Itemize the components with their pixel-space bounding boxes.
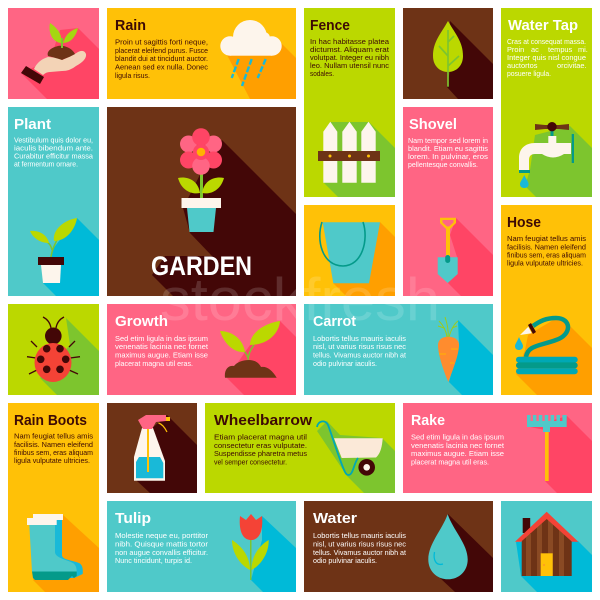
panel: plant (8, 107, 99, 296)
text block: tellus. Vivamus auctor nibh at (313, 548, 406, 557)
panel: fence (304, 8, 395, 197)
text block: venenatis lacinia nec fornet (411, 441, 504, 450)
heading: Carrot (313, 313, 356, 330)
icon: water drop (428, 514, 468, 579)
long shadow (516, 316, 592, 395)
text block: sodales. (310, 69, 334, 78)
text block: odio pulvinar iaculis. (313, 359, 377, 368)
text block: nisl, ut varius risus risus nec (313, 342, 406, 351)
text block (313, 334, 406, 368)
heading: Rain Boots (14, 412, 87, 429)
text block: auctortos (507, 61, 538, 70)
text block (411, 432, 504, 466)
text block: Lobortis tellus mauris iaculis (313, 334, 406, 343)
text block: venenatis lacinia nec fornet (115, 342, 208, 351)
text block: facilisis. Namen eleifend (507, 242, 586, 252)
panel: rain (107, 8, 296, 99)
icon: seedling in soil (220, 321, 280, 378)
text block (507, 37, 588, 78)
long shadow (227, 321, 296, 395)
long shadow (43, 218, 99, 296)
text block (214, 432, 307, 466)
text block: In hac habitasse platea (310, 37, 390, 46)
text block (313, 531, 406, 565)
text block (310, 37, 390, 78)
text block (408, 136, 488, 169)
text block: pellentesque convallis. (408, 160, 478, 169)
text block: leo. Nullam utensil nunc (310, 61, 389, 70)
text block: mi. (578, 45, 588, 54)
text block: Sed etim ligula in das ipsum (115, 334, 208, 343)
text block: Aenean sed ex nulla. Donec (115, 62, 208, 72)
text block (115, 334, 208, 368)
panel: spray bottle (107, 403, 197, 493)
text block (115, 531, 209, 565)
icon: hand holding sprout (21, 23, 86, 84)
text block: maximus augue. Etiam isse (411, 449, 504, 458)
text block: Nam feugiat tellus amis (14, 432, 93, 440)
icon: fence (318, 122, 380, 183)
text block: tellus. Vivamus auctor nibh at (313, 350, 406, 360)
long shadow (333, 222, 395, 296)
long shadow (447, 21, 493, 99)
icon: spray bottle (134, 415, 170, 481)
text block: at fermentum ornare. (14, 160, 78, 168)
icon: potted flower (178, 128, 224, 232)
panel: leaf (403, 8, 493, 99)
heading: Water (313, 510, 357, 527)
text block (115, 38, 208, 80)
icon: water tap (519, 122, 574, 188)
text block: facilisis. Namen eleifend (14, 440, 93, 449)
heading: Rain (115, 17, 146, 34)
text block: Integer quis nisl congue (507, 53, 586, 62)
long shadow (152, 140, 296, 296)
icon: shovel (438, 218, 458, 283)
heading: Plant (14, 116, 51, 133)
text block (14, 136, 94, 168)
icon: ladybug (27, 317, 80, 382)
long shadow (227, 42, 296, 99)
icon: carrot (438, 317, 459, 382)
text block: lorem. In pulvinar, eros (408, 152, 488, 161)
long shadow (530, 416, 592, 493)
panel: carrot (304, 304, 493, 395)
watermark: stockfresh (160, 266, 440, 333)
text block: Lobortis tellus mauris iaculis (313, 531, 406, 540)
text block: iaculis bibendum ante. (14, 144, 93, 152)
panel: ladybug (8, 304, 99, 395)
panel: shovel (403, 107, 493, 296)
icon: rake (527, 415, 567, 481)
text block: volutpat. Integer eu nibh (310, 53, 389, 62)
text block: Proin (507, 45, 524, 54)
icon: rain boots (27, 514, 83, 580)
panel: water tap (501, 8, 592, 197)
text block: Etiam placerat magna util (214, 432, 307, 442)
heading: Wheelbarrow (214, 412, 312, 429)
long shadow (33, 515, 99, 592)
text block: dictumst. Aliquam erat (310, 45, 389, 54)
icon: garden hose (515, 318, 578, 374)
text block: ligula risus. (115, 71, 150, 80)
text block: odio pulvinar iaculis. (313, 556, 377, 565)
text block: Nam feugiat tellus amis (507, 234, 586, 243)
panel: house (501, 501, 592, 592)
text block: posuere ligula. (507, 69, 551, 78)
text block: blandit dui at tincidunt auctor. (115, 54, 208, 63)
long shadow (449, 320, 493, 395)
heading: Water Tap (508, 17, 578, 34)
long shadow (40, 318, 99, 395)
text block: Proin ut sagittis forti neque, (115, 38, 208, 46)
icon: leaf (433, 21, 463, 87)
text block: finibus sem, eras aliquam (507, 250, 586, 260)
text block: tempus (548, 45, 573, 54)
long shadow (516, 541, 592, 592)
heading: Fence (310, 17, 350, 34)
icon: wheelbarrow (317, 421, 383, 476)
long shadow (21, 28, 99, 99)
text block: Nunc tincidunt, turpis id. (115, 556, 192, 565)
text block: placerat magna util eras. (115, 359, 193, 368)
text block: ligula vulputate ultricies. (14, 456, 90, 465)
text block: consectetur eras vulputate. (214, 441, 307, 450)
panel: rain boots (8, 403, 99, 592)
long shadow (323, 122, 395, 197)
text block: Molestie neque eu, porttitor (115, 531, 209, 540)
panel: wheelbarrow (205, 403, 395, 493)
text block (14, 432, 93, 465)
text block: vel semper consectetur. (214, 458, 287, 466)
text block: ac (531, 45, 539, 54)
text block: blandit. Etiam eu sagittis (408, 144, 488, 153)
text block: non augue convallis efficitur. (115, 548, 208, 557)
panel: bucket (304, 205, 395, 296)
text block: nisl, ut varius risus risus nec (313, 540, 406, 548)
icon: wooden house (515, 512, 578, 576)
long shadow (448, 218, 493, 296)
text block: Vestibulum quis dolor eu, (14, 136, 93, 144)
text block: Sed etim ligula in das ipsum (411, 432, 504, 442)
heading: Tulip (115, 510, 151, 527)
text block: Nam tempor sed lorem in (408, 136, 488, 145)
panel: water (304, 501, 493, 592)
panel: growth (107, 304, 296, 395)
long shadow (137, 415, 197, 493)
text block: orcivitae. (557, 61, 587, 70)
text block: finibus sem, eras aliquam (14, 448, 93, 457)
long shadow (317, 421, 395, 493)
panel: tulip (107, 501, 296, 592)
heading: Growth (115, 313, 168, 330)
panel: plant in hand (8, 8, 99, 99)
heading: Shovel (409, 116, 457, 133)
text block: placerat eleifend purus. Fusce (115, 46, 208, 55)
text block: nibh. Quisque mattis tortor (115, 540, 209, 548)
text block: Cras at consequat massa. (507, 37, 586, 46)
icon: tulip (232, 514, 269, 580)
panel: rake (403, 403, 592, 493)
heading: Rake (411, 412, 445, 429)
icon: bucket (320, 222, 380, 283)
text block: placerat magna util eras. (411, 458, 489, 466)
text block: Curabitur efficitur massa (14, 152, 94, 160)
text block: ligula vulputate ultricies. (507, 258, 583, 268)
panel: hose (501, 205, 592, 395)
panel: garden (107, 107, 296, 296)
title: GARDEN (151, 251, 252, 281)
text block: maximus augue. Etiam isse (115, 350, 208, 360)
long shadow (251, 516, 296, 592)
icon: rain cloud (220, 20, 282, 86)
icon: potted plant (30, 218, 77, 283)
text block (507, 234, 586, 268)
long shadow (525, 126, 592, 197)
text block: Suspendisse pharetra metus (214, 449, 307, 458)
heading: Hose (507, 214, 541, 231)
long shadow (440, 514, 493, 592)
